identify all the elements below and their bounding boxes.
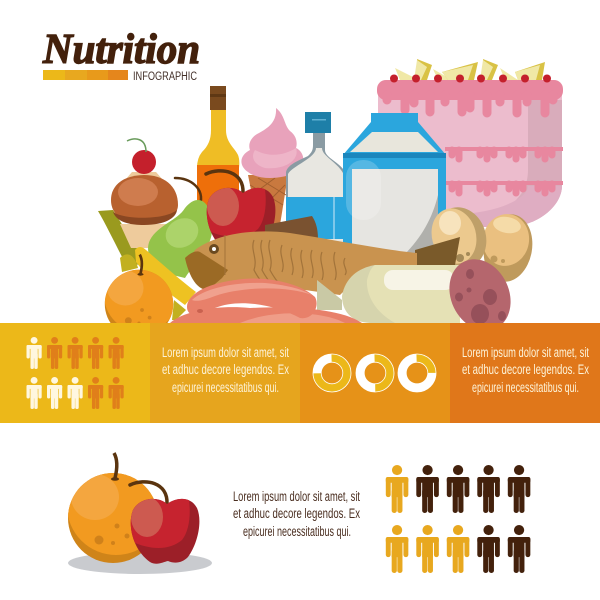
text block — [162, 345, 289, 395]
cupcake — [98, 139, 178, 268]
donut chart 75 percent — [313, 354, 351, 392]
text block: bottom: Lorem ipsum dolor sit amet, sit — [233, 489, 360, 504]
milk carton — [343, 113, 446, 259]
icon: apple — [125, 482, 205, 570]
top apple — [204, 169, 276, 240]
banana — [120, 247, 196, 320]
top orange — [104, 254, 174, 323]
salami — [449, 259, 511, 323]
sausages — [170, 279, 362, 323]
text block: bottom — [233, 489, 360, 539]
title: Nutrition — [42, 27, 200, 73]
people chart: bottom row — [386, 525, 530, 573]
banner panel: text one — [150, 323, 300, 423]
eggs — [432, 207, 532, 282]
ice cream — [241, 108, 303, 225]
water bottle — [286, 112, 343, 242]
text block: bottom: epicurei necessitatibus qui. — [243, 524, 351, 539]
text block: bottom: et adhuc decore legendos. Ex — [233, 506, 360, 521]
text block — [462, 345, 589, 395]
fruit shadow — [68, 552, 212, 574]
banner panel: text two — [450, 323, 600, 423]
banner panel: people stats — [0, 323, 150, 423]
text block: Lorem ipsum dolor sit amet, sit — [162, 345, 289, 360]
subtitle: INFOGRAPHIC — [133, 71, 197, 83]
text block: epicurei necessitatibus qui. — [172, 380, 279, 395]
cherries — [390, 74, 551, 82]
wine bottle — [197, 86, 240, 206]
icon: orange — [65, 453, 165, 570]
cake — [377, 59, 563, 227]
donut chart 50 percent — [356, 354, 394, 392]
people chart: top row — [386, 465, 530, 513]
white sausage — [317, 265, 460, 323]
donut chart 25 percent — [398, 354, 436, 392]
text block: et adhuc decore legendos. Ex — [162, 362, 289, 377]
banner panel: donut charts — [300, 323, 450, 423]
food illustration — [98, 59, 563, 344]
lemon wedges — [395, 59, 545, 80]
title colour bar — [43, 70, 128, 80]
icon: people row 2 — [26, 377, 124, 409]
icon: people row 1 — [26, 337, 124, 369]
fish — [185, 216, 460, 295]
pear — [148, 178, 212, 278]
